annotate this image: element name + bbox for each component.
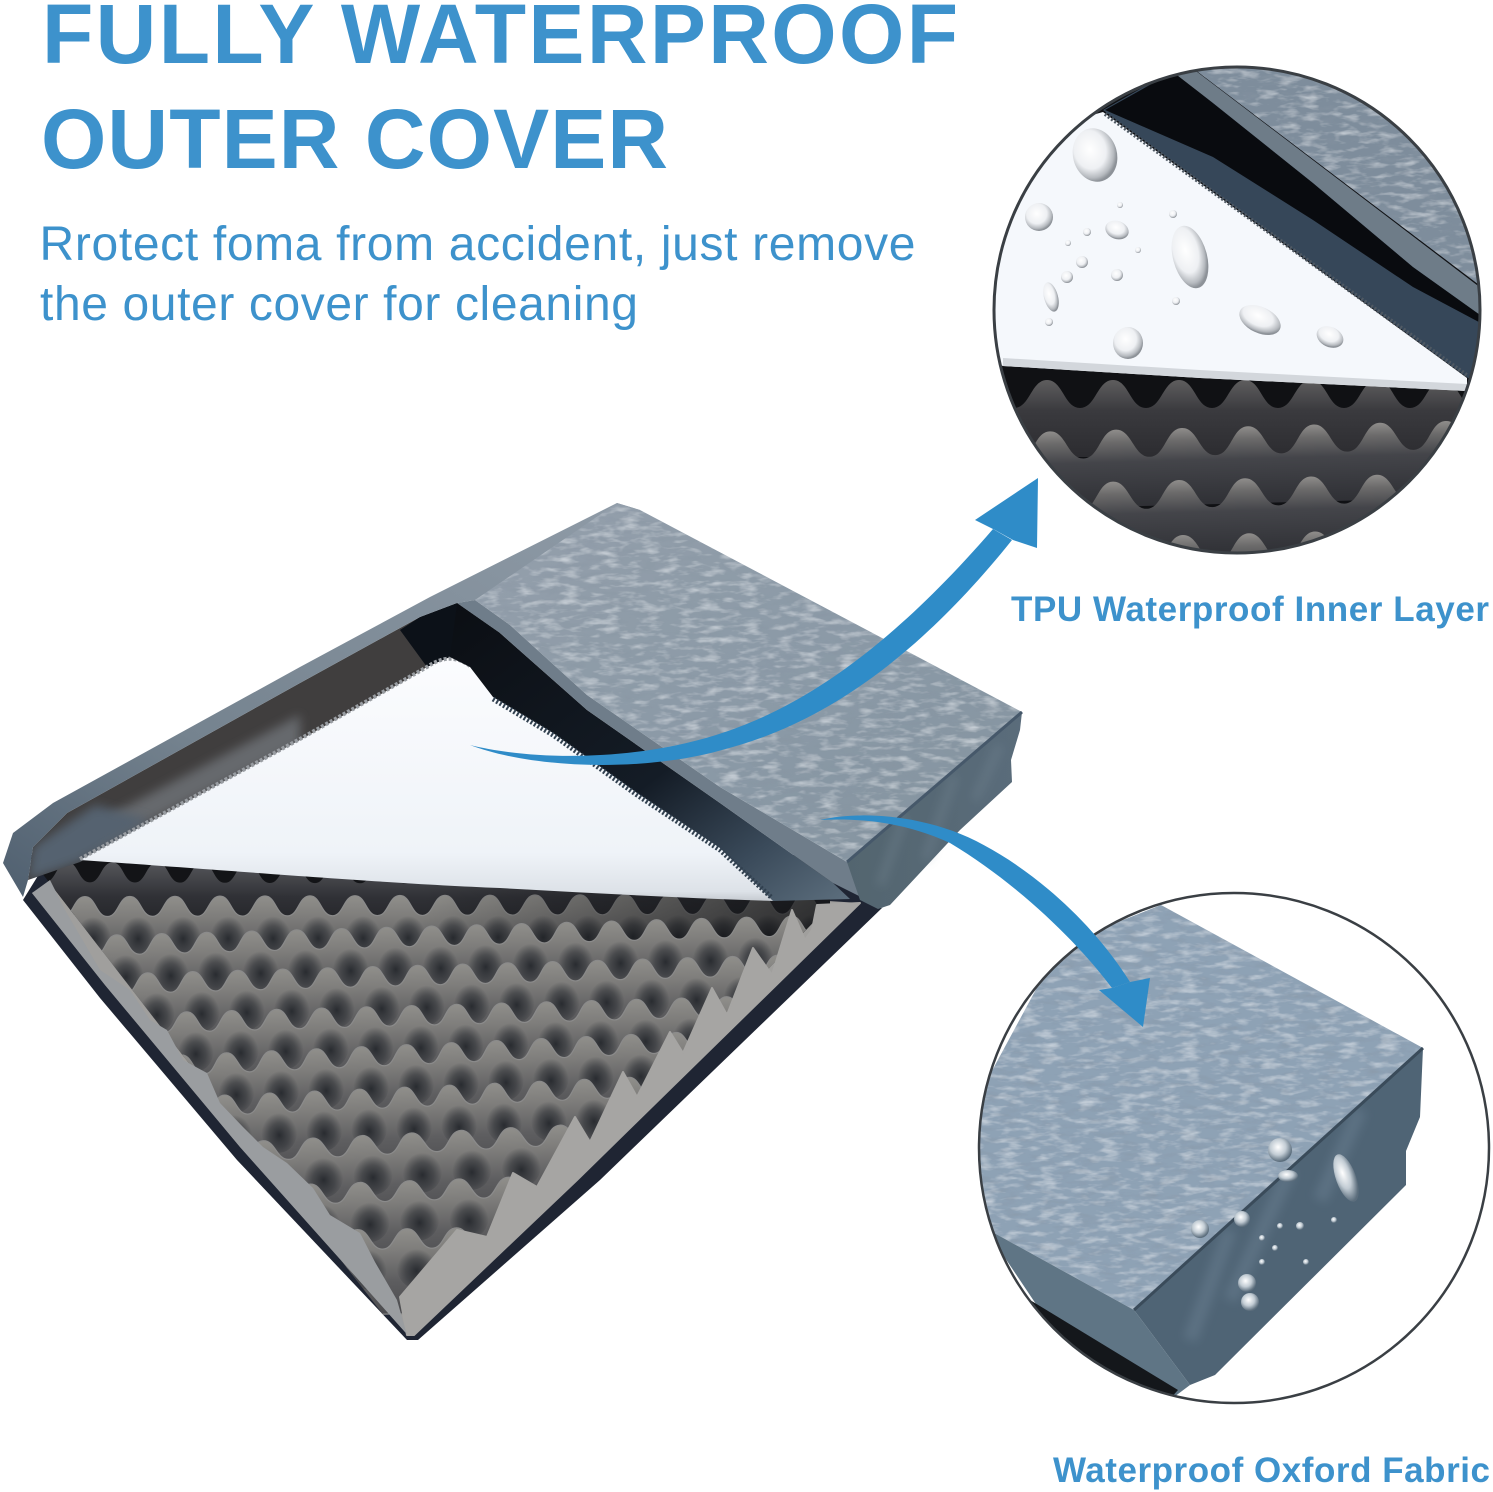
white TPU inner layer <box>80 660 775 901</box>
title: Fully Waterproof Outer Cover <box>41 0 958 186</box>
stitching along inner layer <box>80 659 470 859</box>
subtitle text block: Rrotect foma from accident, just remove <box>40 218 916 271</box>
folded flap side face <box>847 712 1022 909</box>
mattress illustration <box>0 503 1328 1340</box>
grey flap close-up <box>1173 68 1490 322</box>
dark base strip <box>1031 1300 1178 1394</box>
title: Fully Waterproof Outer Cover: OUTER COVER <box>41 92 668 186</box>
fabric side face close-up <box>1134 1048 1423 1385</box>
subtitle text block <box>40 218 916 331</box>
light cut edge of foam, left <box>32 880 407 1335</box>
circle outline <box>979 893 1489 1403</box>
dark seam band close-up <box>1103 72 1490 385</box>
light cut edge of foam, right <box>400 903 860 1335</box>
water drops on sheet <box>1025 123 1347 359</box>
foam base <box>32 855 860 1334</box>
dark band beneath folded flap <box>450 603 850 901</box>
navy base of the mattress <box>23 840 882 1340</box>
fabric front-left side close-up <box>995 1234 1190 1396</box>
top cover strip <box>3 503 640 897</box>
label: Waterproof Oxford Fabric: Waterproof Oxford Fabric <box>1053 1451 1490 1490</box>
fabric top face close-up <box>960 905 1423 1310</box>
white sheet close-up <box>985 112 1467 391</box>
arrow: to Oxford fabric <box>820 815 1150 1027</box>
subtitle text block: the outer cover for cleaning <box>40 278 638 331</box>
folded flap lip <box>457 600 883 908</box>
fabric folds <box>1190 1110 1360 1340</box>
label: TPU Waterproof Inner Layer: TPU Waterproof Inner Layer <box>1011 590 1489 629</box>
circle outline <box>994 67 1480 553</box>
water drops on fabric <box>1191 1138 1364 1311</box>
folded flap top face <box>475 503 1022 862</box>
egg crate foam rows <box>31 855 830 1315</box>
interior shadow of the opened cover <box>28 603 500 880</box>
arrow: to TPU inner layer <box>470 478 1038 765</box>
circle inset: TPU inner layer close-up <box>992 66 1482 554</box>
circle inset: Oxford fabric close-up <box>960 893 1489 1410</box>
foam waves close-up <box>1016 380 1462 552</box>
